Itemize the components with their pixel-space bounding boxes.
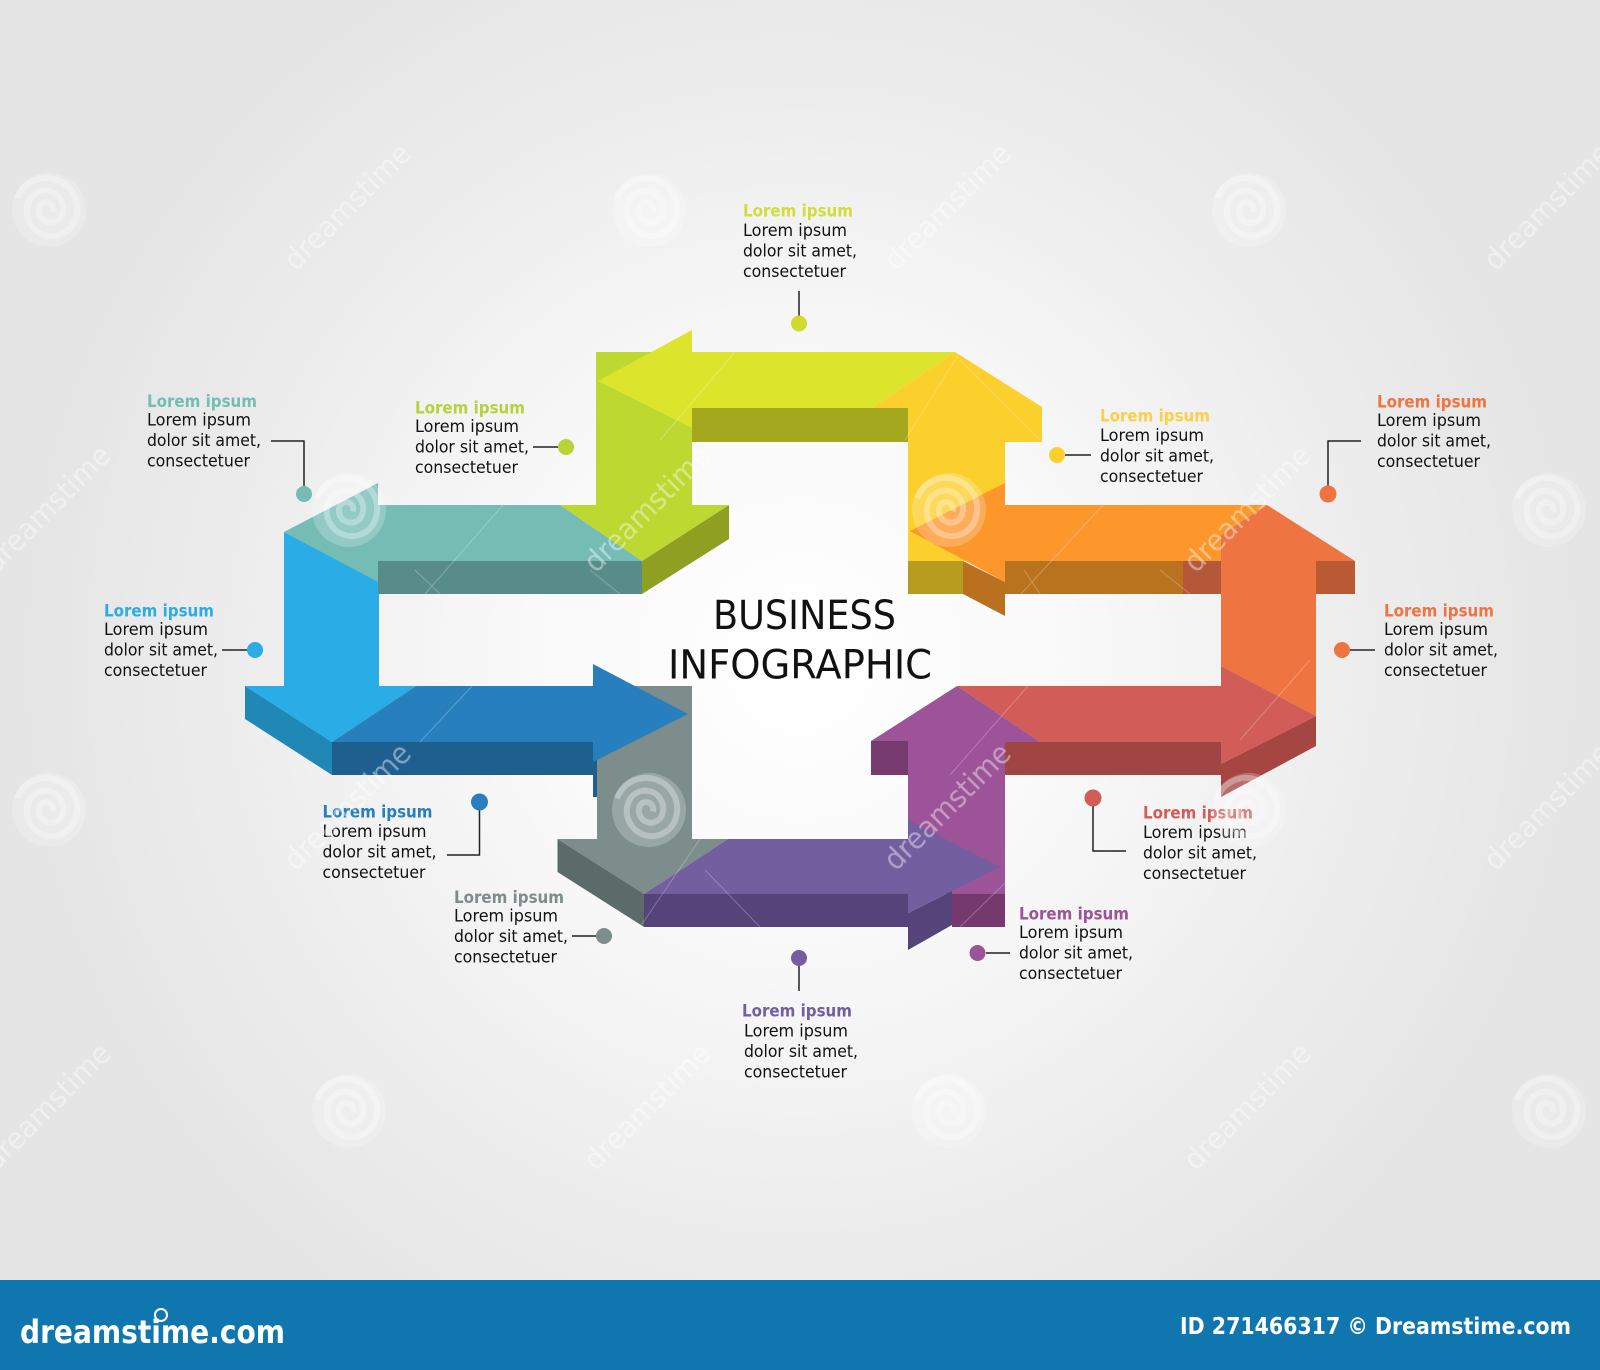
callout: red: Lorem ipsum: [1143, 804, 1253, 822]
callout: blue: consectetuer: [322, 863, 426, 882]
callout: yellow: consectetuer: [1100, 467, 1203, 486]
footer bar: [0, 1280, 1600, 1370]
callout: gray: Lorem ipsum: [454, 888, 564, 907]
callout: sky blue: dolor sit amet,: [104, 640, 218, 660]
title: BUSINESS: [713, 593, 896, 639]
callout: yellow: Lorem ipsum: [1100, 426, 1204, 445]
callout: lime: Lorem ipsum: [415, 417, 519, 436]
arrow: lime down arrow: [560, 352, 729, 594]
callout: coral top: [1320, 392, 1491, 502]
callout: teal: [147, 392, 312, 502]
callout: coral right: consectetuer: [1384, 661, 1487, 680]
watermark overlay: dreamstime: [877, 736, 1018, 877]
callout: blue: Lorem ipsum: [322, 822, 426, 841]
callout: yellow-green: Lorem ipsum: [743, 202, 853, 220]
callout: coral top: Lorem ipsum: [1377, 392, 1487, 412]
arrow: orange left arrow: [910, 483, 1267, 616]
title: INFOGRAPHIC: [668, 642, 932, 688]
callout: red: dolor sit amet,: [1143, 844, 1257, 862]
callout: gray: Lorem ipsum: [454, 906, 558, 926]
watermark overlay: dreamstime: [577, 1036, 718, 1177]
callout: red: consectetuer: [1143, 864, 1246, 883]
callout: coral top: dolor sit amet,: [1377, 432, 1491, 450]
callout: purple: Lorem ipsum: [1019, 904, 1129, 924]
callout: indigo: consectetuer: [744, 1062, 847, 1082]
callout: blue: dolor sit amet,: [322, 842, 436, 862]
callout: teal: consectetuer: [147, 452, 250, 470]
callout: blue: Lorem ipsum: [322, 802, 432, 822]
callout: indigo: dolor sit amet,: [744, 1042, 858, 1061]
watermark overlay: dreamstime: [877, 136, 1018, 277]
callout: red: [1084, 790, 1257, 883]
arrow: teal left arrow: [284, 483, 642, 594]
title: [668, 593, 932, 688]
arrow: yellow-green left arrow: [598, 330, 955, 442]
arrow: blue right arrow: [332, 664, 688, 775]
callout: yellow: [1049, 406, 1214, 486]
callout: gray: consectetuer: [454, 948, 557, 966]
callout: red: Lorem ipsum: [1143, 823, 1247, 842]
arrow: coral up arrow: [1183, 505, 1355, 716]
callout: coral top: consectetuer: [1377, 452, 1480, 471]
callout: purple: consectetuer: [1019, 964, 1122, 983]
callout: sky blue: consectetuer: [104, 661, 207, 680]
callout: lime: Lorem ipsum: [415, 398, 525, 418]
arrow: purple up arrow: [871, 686, 1040, 927]
callout: lime: consectetuer: [415, 458, 518, 477]
callout: lime: dolor sit amet,: [415, 438, 529, 456]
callout: yellow: dolor sit amet,: [1100, 446, 1214, 466]
arrow: yellow up arrow: [872, 352, 1042, 594]
callout: sky blue: Lorem ipsum: [104, 620, 208, 639]
arrow: sky blue down arrow: [245, 532, 416, 775]
callout: teal: Lorem ipsum: [147, 392, 257, 411]
callout: teal: Lorem ipsum: [147, 410, 251, 430]
callout: yellow-green: consectetuer: [743, 262, 846, 281]
watermark overlay: dreamstime: [1177, 438, 1318, 579]
arrow: red right arrow: [957, 666, 1316, 797]
callout: sky blue: [104, 602, 263, 680]
callout: coral right: Lorem ipsum: [1384, 620, 1488, 639]
callout: indigo: Lorem ipsum: [744, 1022, 848, 1040]
callout: teal: dolor sit amet,: [147, 431, 261, 450]
callout: sky blue: Lorem ipsum: [104, 602, 214, 620]
arrow: gray down arrow with blue shadow strip: [558, 686, 728, 927]
watermark overlay: dreamstime: [277, 136, 418, 277]
callout: yellow-green: [743, 202, 857, 332]
callout: coral top: Lorem ipsum: [1377, 411, 1481, 430]
callout: coral right: Lorem ipsum: [1384, 602, 1494, 620]
watermark overlay: dreamstime: [277, 736, 418, 877]
callout: gray: dolor sit amet,: [454, 927, 568, 946]
callout: purple: Lorem ipsum: [1019, 923, 1123, 942]
callout: coral right: [1334, 602, 1498, 680]
footer logo: dreamstime.com: [20, 1313, 285, 1351]
callout: indigo: [742, 950, 858, 1082]
arrow diagram: [245, 330, 1355, 950]
callout: yellow-green: dolor sit amet,: [743, 242, 857, 260]
callout: indigo: Lorem ipsum: [742, 1002, 852, 1020]
watermark overlay: dreamstime: [1177, 1036, 1318, 1177]
callout: yellow-green: Lorem ipsum: [743, 221, 847, 240]
callout: yellow: Lorem ipsum: [1100, 406, 1210, 426]
callout: lime: [415, 398, 574, 477]
callout: gray: [454, 888, 612, 966]
callout: purple: [970, 904, 1133, 983]
callout: blue: [322, 794, 488, 882]
arrow: indigo right arrow: [644, 820, 1000, 950]
callout: coral right: dolor sit amet,: [1384, 640, 1498, 660]
watermark overlay: dreamstime: [577, 438, 718, 579]
callout: purple: dolor sit amet,: [1019, 944, 1133, 962]
watermark overlay: [0, 136, 1600, 1177]
